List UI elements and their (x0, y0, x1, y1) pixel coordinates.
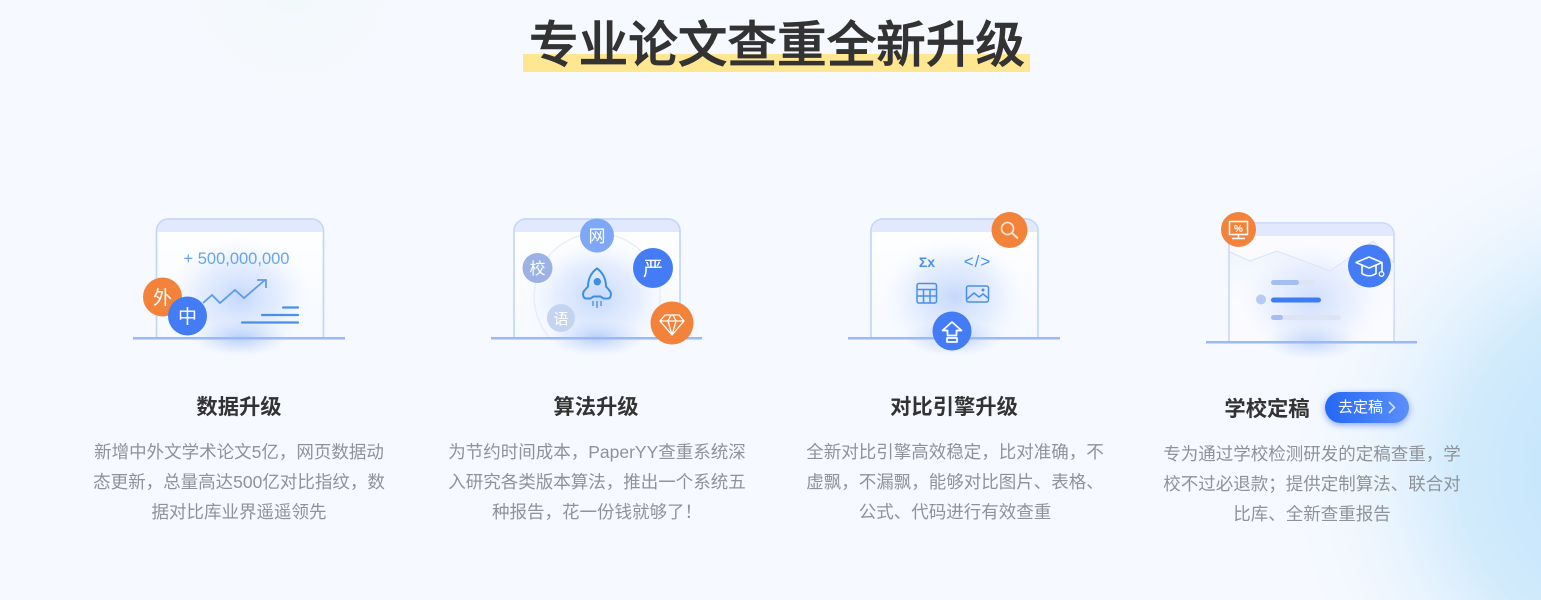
heading: algorithm upgrade: 算法升级 (553, 395, 639, 419)
text: comparison engine upgrade (806, 442, 1104, 522)
text: data upgrade (93, 442, 385, 522)
text: school final check: 校不过必退款；提供定制算法、联合对 (1163, 474, 1461, 494)
button: go to final check (1325, 392, 1409, 423)
text: school final check (1163, 444, 1461, 524)
text: data upgrade: 态更新，总量高达500亿对比指纹，数 (93, 472, 385, 492)
title (523, 17, 1030, 73)
illustration: school final check: % (1234, 224, 1243, 235)
illustration: data upgrade: 中 (178, 302, 197, 329)
text: comparison engine upgrade: 公式、代码进行有效查重 (859, 502, 1051, 522)
text: data upgrade: 据对比库业界遥遥领先 (152, 502, 326, 522)
illustration: comparison engine upgrade: Σx (919, 254, 935, 270)
text: data upgrade: 新增中外文学术论文5亿，网页数据动 (94, 442, 384, 462)
text: school final check: 比库、全新查重报告 (1233, 504, 1391, 524)
heading: school final check: 学校定稿 (1224, 397, 1310, 421)
text: comparison engine upgrade: 虚飘，不漏飘，能够对比图片、表格、 (806, 472, 1104, 492)
illustration: school final check (1206, 212, 1417, 356)
illustration: algorithm upgrade: 校 (529, 255, 546, 279)
illustration: comparison engine upgrade (848, 212, 1060, 352)
heading: comparison engine upgrade: 对比引擎升级 (890, 395, 1018, 419)
illustration: algorithm upgrade (491, 218, 702, 352)
illustration: data upgrade (133, 218, 345, 352)
title text: 专业论文查重全新升级 (529, 17, 1025, 73)
text: algorithm upgrade (448, 442, 746, 522)
heading: data upgrade: 数据升级 (196, 395, 282, 419)
text: school final check: 专为通过学校检测研发的定稿查重，学 (1163, 444, 1461, 464)
text: algorithm upgrade: 入研究各类版本算法，推出一个系统五 (448, 472, 746, 492)
illustration: algorithm upgrade: 语 (553, 308, 569, 329)
illustration: data upgrade: + 500,000,000 (184, 250, 289, 268)
title highlight bar (523, 54, 1030, 72)
illustration: comparison engine upgrade: </> (964, 252, 991, 271)
text: comparison engine upgrade: 全新对比引擎高效稳定，比对准确，不 (806, 442, 1104, 462)
text: algorithm upgrade: 种报告，花一份钱就够了！ (492, 502, 702, 522)
illustration: data upgrade: 外 (153, 283, 172, 310)
illustration: algorithm upgrade: 严 (643, 252, 663, 282)
illustration: algorithm upgrade: 网 (588, 222, 606, 247)
button: go to final check: 去定稿 (1338, 399, 1383, 416)
text: algorithm upgrade: 为节约时间成本，PaperYY查重系统深 (448, 442, 746, 462)
